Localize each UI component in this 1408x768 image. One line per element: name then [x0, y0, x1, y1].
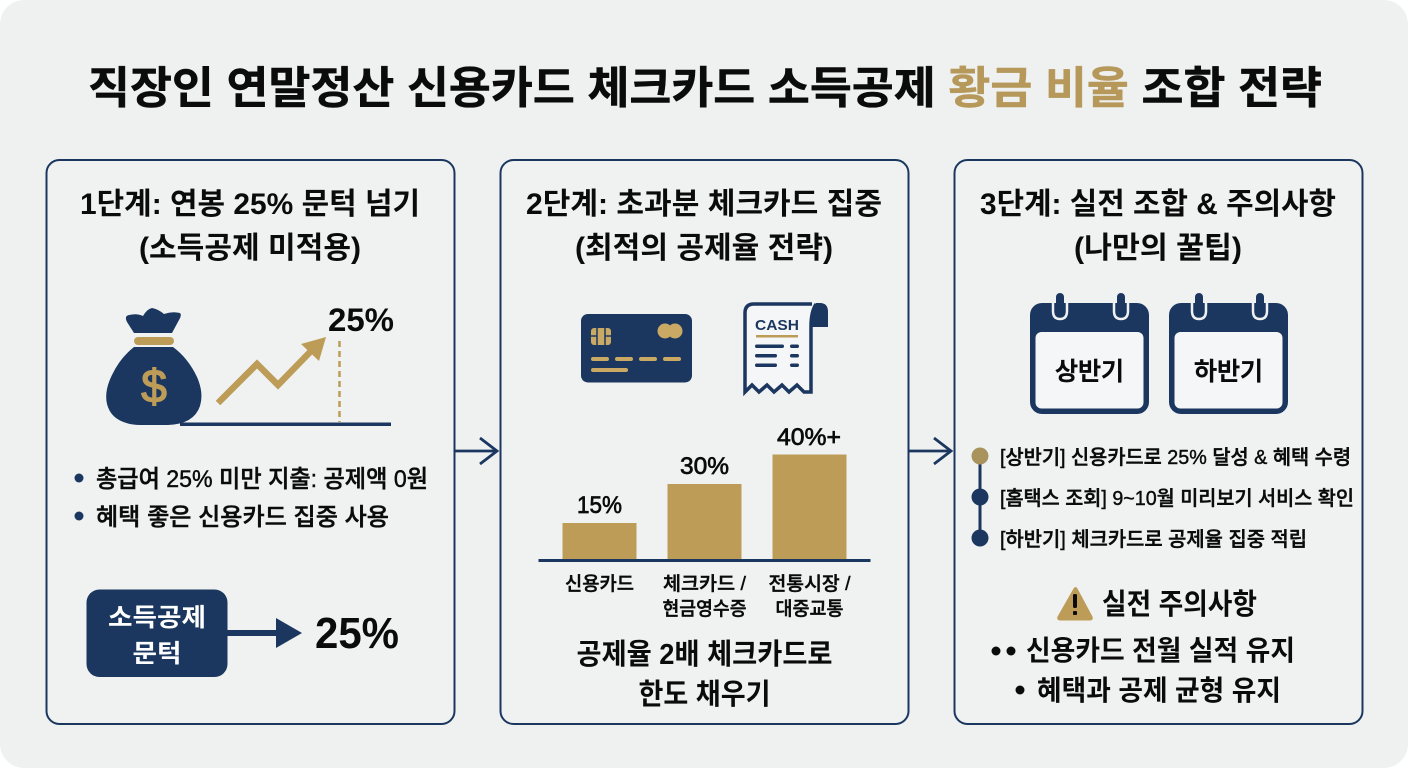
baseline: [180, 422, 391, 426]
bar chart: [538, 424, 870, 620]
icon: money bag: [106, 308, 201, 425]
timeline text: [상반기] 신용카드로 25% 달성 & 혜택 수령: [1000, 446, 1351, 469]
step 2 heading: 2단계: 초과분 체크카드 집중: [526, 188, 882, 221]
icon: calendar second half: 하반기: [1194, 358, 1263, 386]
caution heading: 실전 주의사항: [1102, 588, 1257, 621]
25% label: 25%: [328, 302, 394, 338]
step 3 heading: [980, 188, 1336, 265]
step 1 heading: [80, 188, 420, 265]
bullet list: 총급여 25% 미만 지출: 공제액 0원: [96, 466, 428, 493]
timeline text: [홈택스 조회] 9~10월 미리보기 서비스 확인: [1000, 487, 1354, 510]
icon: credit card: [581, 314, 692, 382]
panel: step 1: [46, 160, 454, 724]
timeline: [972, 446, 1354, 551]
threshold box: [86, 590, 228, 677]
icon: cash receipt: CASH: [755, 317, 799, 334]
step 2 summary: [576, 638, 832, 711]
bar: credit card 15%: [562, 523, 636, 560]
bar labels: 체크카드 /: [663, 573, 747, 595]
threshold dashed line: [338, 341, 341, 422]
timeline text: [하반기] 체크카드로 공제율 집중 적립: [1000, 528, 1307, 551]
icon: cash receipt: [745, 303, 828, 392]
caution list: [992, 635, 1295, 706]
step 3 heading: (나만의 꿀팁): [1074, 232, 1242, 265]
bar labels: 현금영수증: [662, 598, 746, 620]
threshold box: 소득공제: [108, 604, 206, 632]
step 1 heading: 1단계: 연봉 25% 문턱 넘기: [80, 188, 420, 221]
bar values: 40%+: [777, 424, 841, 451]
title: 직장인 연말정산 신용카드 체크카드 소득공제 황금 비율 조합 전략: [88, 64, 1322, 113]
bullet list: 혜택 좋은 신용카드 집중 사용: [96, 504, 389, 531]
threshold box: 문턱: [132, 640, 182, 668]
large 25%: 25%: [315, 609, 399, 658]
bar labels: 신용카드: [565, 573, 634, 595]
bar values: 30%: [680, 453, 729, 480]
arrow: step 1 to 2: [455, 438, 497, 464]
icon: calendar second half: [1169, 293, 1288, 414]
icon: warning triangle: [1059, 588, 1091, 619]
bar values: [577, 424, 841, 519]
chart axis: [538, 559, 870, 562]
icon: money bag: $: [141, 360, 167, 412]
icon: calendar first half: [1030, 293, 1149, 414]
caution list: 신용카드 전월 실적 유지: [1026, 635, 1295, 666]
arrow head: [301, 337, 326, 361]
step 2 heading: (최적의 공제율 전략): [575, 232, 833, 265]
panel: step 2: [500, 160, 908, 724]
arrow: step 2 to 3: [909, 438, 951, 464]
icon: rising arrow: [218, 350, 312, 403]
step 2 summary: 한도 채우기: [638, 678, 770, 711]
bar values: 15%: [577, 492, 622, 519]
step 1 heading: (소득공제 미적용): [139, 232, 361, 265]
arrow to 25%: [227, 618, 302, 648]
icon: calendar first half: 상반기: [1055, 358, 1124, 386]
bar labels: 대중교통: [776, 598, 844, 620]
bar labels: [565, 573, 851, 620]
step 3 heading: 3단계: 실전 조합 & 주의사항: [980, 188, 1336, 221]
panel: step 3: [954, 160, 1362, 724]
bar labels: 전통시장 /: [768, 573, 851, 595]
bar: check card 30%: [668, 484, 742, 560]
step 2 heading: [526, 188, 882, 265]
bullet list: [74, 466, 428, 531]
timeline text: [1000, 446, 1354, 551]
bar: traditional market 40%+: [772, 454, 846, 560]
step 2 summary: 공제율 2배 체크카드로: [576, 638, 832, 671]
caution list: 혜택과 공제 균형 유지: [1037, 675, 1281, 706]
